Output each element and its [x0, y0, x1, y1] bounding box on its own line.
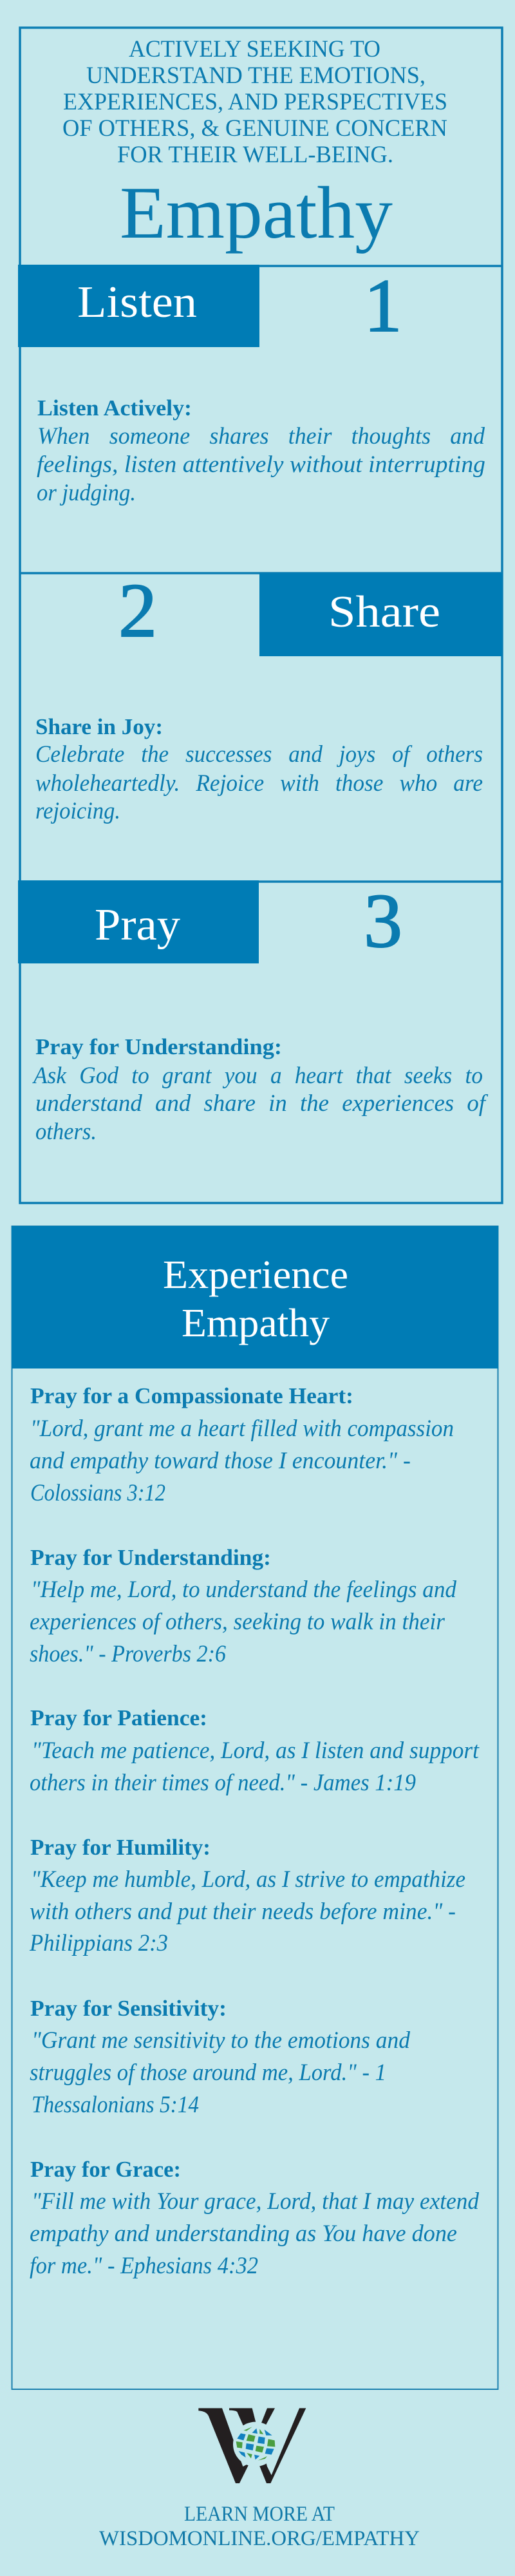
prayer: grace: for me." - Ephesians 4:32 [30, 2253, 258, 2279]
step 3 banner: Pray [18, 880, 259, 963]
step 3 number: 3 [364, 878, 402, 963]
prayer: compassionate heart [30, 1383, 454, 1506]
footer call to action: WISDOMONLINE.ORG/EMPATHY [99, 2527, 420, 2550]
step 3 text [32, 1034, 489, 1145]
definition text: UNDERSTAND THE EMOTIONS, [86, 62, 426, 89]
prayer: understanding: experiences of others, seeking to walk in their [30, 1609, 445, 1635]
prayer: grace [30, 2157, 479, 2279]
prayer: grace: "Fill me with Your grace, Lord, that I may extend [32, 2188, 479, 2215]
step 1 banner: Listen [18, 265, 259, 347]
step 3 text: Ask God to grant you a heart that seeks to [32, 1063, 483, 1089]
step 1 number: 1 [364, 263, 402, 348]
prayer: understanding: shoes." - Proverbs 2:6 [30, 1641, 226, 1667]
step 2 text: Celebrate the successes and joys of others [35, 741, 483, 768]
step 1 text: When someone shares their thoughts and [37, 423, 485, 450]
step 2 banner: Share [259, 573, 502, 656]
panel heading: Empathy [182, 1302, 330, 1345]
prayer: sensitivity [30, 1996, 410, 2118]
step 2 text: Share in Joy: [35, 714, 163, 739]
step 2 text [35, 714, 483, 824]
definition text [62, 36, 447, 168]
prayer: compassionate heart: "Lord, grant me a heart filled with compassion [30, 1416, 454, 1442]
prayer: patience: Pray for Patience: [30, 1705, 207, 1730]
panel heading: Experience [163, 1253, 348, 1297]
prayer: humility: Philippians 2:3 [29, 1930, 168, 1956]
prayer: sensitivity: Pray for Sensitivity: [30, 1996, 227, 2021]
prayer: humility: "Keep me humble, Lord, as I strive to empathize [31, 1866, 465, 1893]
step 3 text: others. [35, 1119, 97, 1145]
step 2 text: wholeheartedly. Rejoice with those who are [35, 770, 483, 797]
definition text: ACTIVELY SEEKING TO [129, 36, 380, 62]
step 1 text: or judging. [37, 480, 136, 506]
panel: Experience Empathy prayers [12, 1226, 498, 2389]
prayer: sensitivity: "Grant me sensitivity to the emotions and [32, 2027, 410, 2054]
definition text: FOR THEIR WELL-BEING. [117, 142, 393, 168]
prayer: understanding: "Help me, Lord, to understand the feelings and [31, 1577, 456, 1603]
footer call to action: LEARN MORE AT [184, 2503, 335, 2526]
prayer: sensitivity: struggles of those around me, Lord." - 1 [30, 2060, 386, 2086]
step 3 text: Pray for Understanding: [35, 1034, 282, 1059]
step 1 text [37, 395, 485, 506]
step 2 number: 2 [118, 567, 157, 653]
prayer: sensitivity: Thessalonians 5:14 [32, 2092, 199, 2118]
step 1 text: feelings, listen attentively without interrupting [37, 451, 485, 478]
prayer: grace: empathy and understanding as You have done [30, 2221, 457, 2247]
prayer: grace: Pray for Grace: [30, 2157, 181, 2182]
panel: definition and three steps [18, 28, 502, 1203]
step 3 banner: Pray: Pray [95, 900, 180, 950]
prayer: patience: others in their times of need." - James 1:19 [30, 1770, 416, 1796]
step 3 text: understand and share in the experiences of [35, 1090, 489, 1117]
definition text: OF OTHERS, & GENUINE CONCERN [62, 115, 447, 142]
prayer: humility [29, 1835, 465, 1956]
prayer: understanding: Pray for Understanding: [30, 1545, 271, 1570]
footer call to action [99, 2503, 420, 2550]
step 1 text: Listen Actively: [37, 395, 192, 421]
definition text: EXPERIENCES, AND PERSPECTIVES [63, 89, 447, 115]
panel heading [12, 1226, 498, 1368]
step 2 text: rejoicing. [35, 798, 120, 824]
prayer: compassionate heart: and empathy toward those I encounter." - [30, 1448, 411, 1474]
step 1 banner: Listen: Listen [77, 278, 197, 327]
icon: W globe logo [198, 2408, 306, 2483]
prayer: understanding [30, 1545, 456, 1667]
prayer: compassionate heart: Colossians 3:12 [30, 1480, 165, 1506]
prayer: patience [30, 1705, 480, 1796]
title: Empathy [120, 172, 393, 254]
prayer: compassionate heart: Pray for a Compassionate Heart: [30, 1383, 353, 1408]
step 2 banner: Share: Share [328, 587, 440, 637]
prayer: patience: "Teach me patience, Lord, as I listen and support [32, 1738, 480, 1764]
prayer: humility: Pray for Humility: [30, 1835, 211, 1860]
prayer: humility: with others and put their needs before mine." - [30, 1899, 456, 1925]
